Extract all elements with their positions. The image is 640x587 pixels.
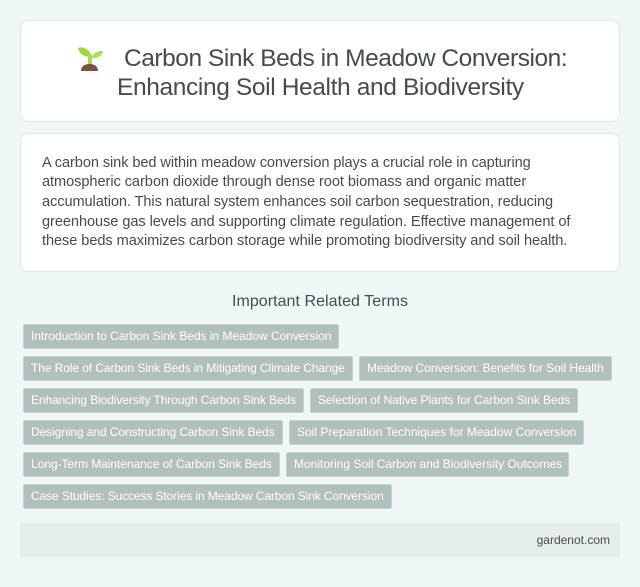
tag [359,356,612,381]
tag [23,484,392,509]
panel: title: Enhancing Soil Health and Biodiversity [117,74,524,101]
title text: Carbon Sink Beds in Meadow Conversion: [124,45,567,72]
tag: Monitoring Soil Carbon and Biodiversity Outcomes [294,457,562,471]
description text: these beds maximizes carbon storage while promoting biodiversity and soil health. [42,233,567,249]
tag: Enhancing Biodiversity Through Carbon Sink Beds [31,393,296,407]
footer [20,523,620,557]
tag [23,388,304,413]
description text: accumulation. This natural system enhances soil carbon sequestration, reducing [42,194,553,210]
icon: seedling [78,47,103,71]
tag: Case Studies: Success Stories in Meadow Carbon Sink Conversion [31,489,384,503]
tag [286,452,569,477]
tag: Introduction to Carbon Sink Beds in Meadow Conversion [31,329,331,343]
tag [23,324,339,349]
description text: greenhouse gas levels and supporting climate regulation. Effective management of [42,214,570,230]
tag list [23,324,612,509]
tag [23,452,280,477]
tag: Long-Term Maintenance of Carbon Sink Beds [31,457,272,471]
description text: A carbon sink bed within meadow conversion plays a crucial role in capturing [42,155,531,171]
tag: Soil Preparation Techniques for Meadow Conversion [297,425,576,439]
panel: description [20,133,620,272]
tag [23,420,283,445]
description text [42,155,570,249]
tag [289,420,584,445]
tag: Meadow Conversion: Benefits for Soil Health [367,361,604,375]
tag: The Role of Carbon Sink Beds in Mitigating Climate Change [31,361,345,375]
tag [23,356,353,381]
panel: title [20,20,620,122]
footer text: gardenot.com [537,533,610,547]
tag [310,388,578,413]
tag: Designing and Constructing Carbon Sink Beds [31,425,275,439]
heading: related terms: Important Related Terms [232,293,408,310]
tag: Selection of Native Plants for Carbon Sink Beds [318,393,570,407]
description text: atmospheric carbon dioxide through dense root biomass and organic matter [42,174,526,190]
